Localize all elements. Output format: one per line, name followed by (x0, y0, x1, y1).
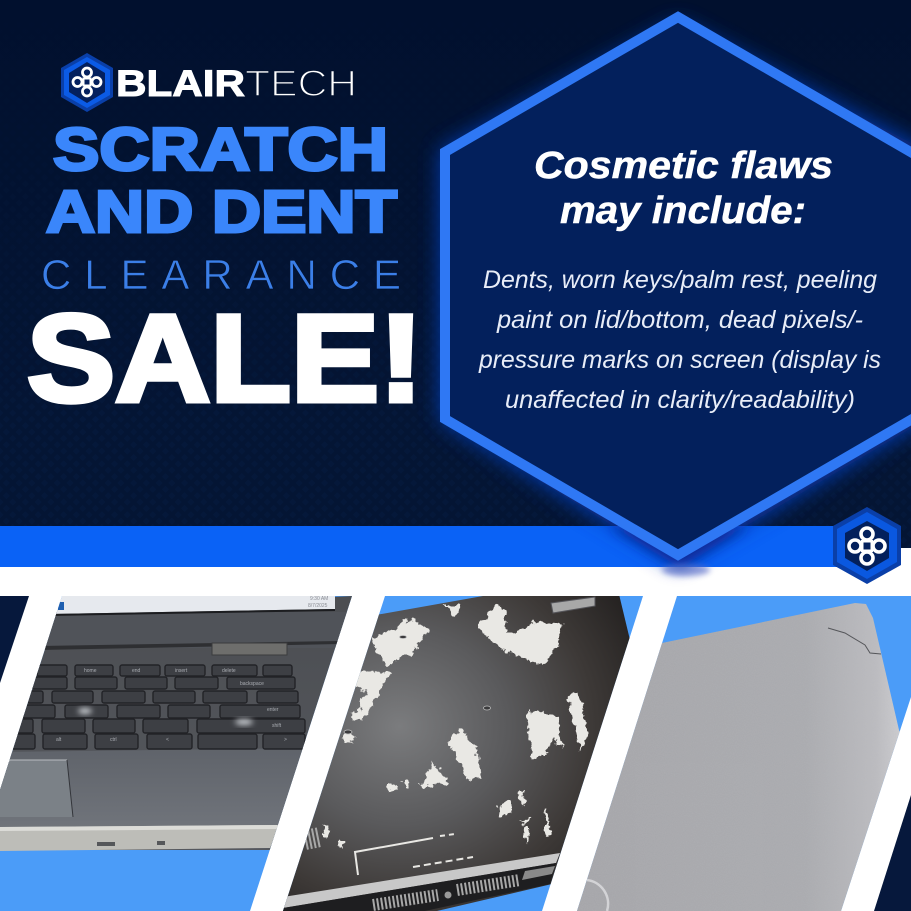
key legends: > (284, 737, 287, 743)
panel: dark corner right (874, 795, 911, 911)
key legends (56, 668, 287, 743)
silver front edge (0, 825, 280, 851)
laptop screen strip with date: 8/7/2025 (308, 603, 328, 609)
laptop screen strip with date (50, 596, 335, 616)
heading: sale: SALE! (27, 290, 423, 428)
small hexagon badge (833, 507, 901, 584)
white lower band (0, 548, 911, 911)
hexagon shadow glow (441, 22, 911, 576)
callout body text (478, 266, 881, 414)
screw holes (344, 636, 490, 734)
hexagon callout panel (445, 17, 911, 555)
hairline crack (828, 628, 881, 654)
power button (212, 643, 287, 655)
paint chips (322, 605, 588, 848)
key glare (78, 708, 253, 725)
latch (551, 597, 595, 613)
key legends: backspace (240, 681, 264, 687)
panel: peeling paint photo (270, 590, 643, 911)
key legends: end (132, 668, 141, 674)
key legends: delete (222, 668, 236, 674)
callout body text: paint on lid/bottom, dead pixels/- (496, 306, 863, 334)
icon: logo hexagon (61, 53, 113, 112)
panel: keyboard photo (0, 596, 360, 911)
vent screw (444, 892, 452, 898)
callout heading: Cosmetic flaws (534, 145, 833, 187)
callout heading: may include: (560, 190, 806, 232)
panel: dark corner left (0, 596, 29, 683)
logo: Blair Tech (61, 53, 357, 112)
blue banner bar (0, 526, 836, 568)
palm rest (0, 748, 310, 828)
key legends: enter (267, 707, 279, 713)
lid grain (560, 600, 911, 911)
front rim (283, 853, 560, 911)
vents (305, 837, 520, 905)
wordmark TECH: TECH (245, 63, 357, 104)
laptop deck (0, 596, 352, 850)
callout heading (534, 145, 833, 232)
headline (27, 116, 423, 428)
heading: and dent: AND DENT (46, 179, 397, 245)
logo arc (587, 880, 608, 911)
key legends: insert (175, 668, 188, 674)
key legends: alt (56, 737, 62, 743)
laptop underside (270, 590, 630, 911)
callout body text: unaffected in clarity/readability) (505, 386, 855, 414)
panel: scuffed lid photo (560, 596, 911, 911)
key legends: < (166, 737, 169, 743)
key legends: shift (272, 723, 282, 729)
wordmark BLAIR: BLAIR (116, 63, 245, 104)
heading: clearance: CLEARANCE (41, 251, 401, 298)
touchpad (0, 760, 73, 817)
key legends: ctrl (110, 737, 117, 743)
laptop lid (560, 603, 911, 911)
heading: scratch: SCRATCH (53, 116, 388, 183)
callout body text: Dents, worn keys/palm rest, peeling (483, 266, 877, 294)
callout body text: pressure marks on screen (display is (478, 346, 881, 374)
background: dark navy header (0, 0, 911, 568)
laptop screen strip with date: 9:30 AM (310, 596, 328, 602)
scratches (355, 834, 473, 875)
keyboard keys (10, 665, 305, 749)
key legends: home (84, 668, 97, 674)
